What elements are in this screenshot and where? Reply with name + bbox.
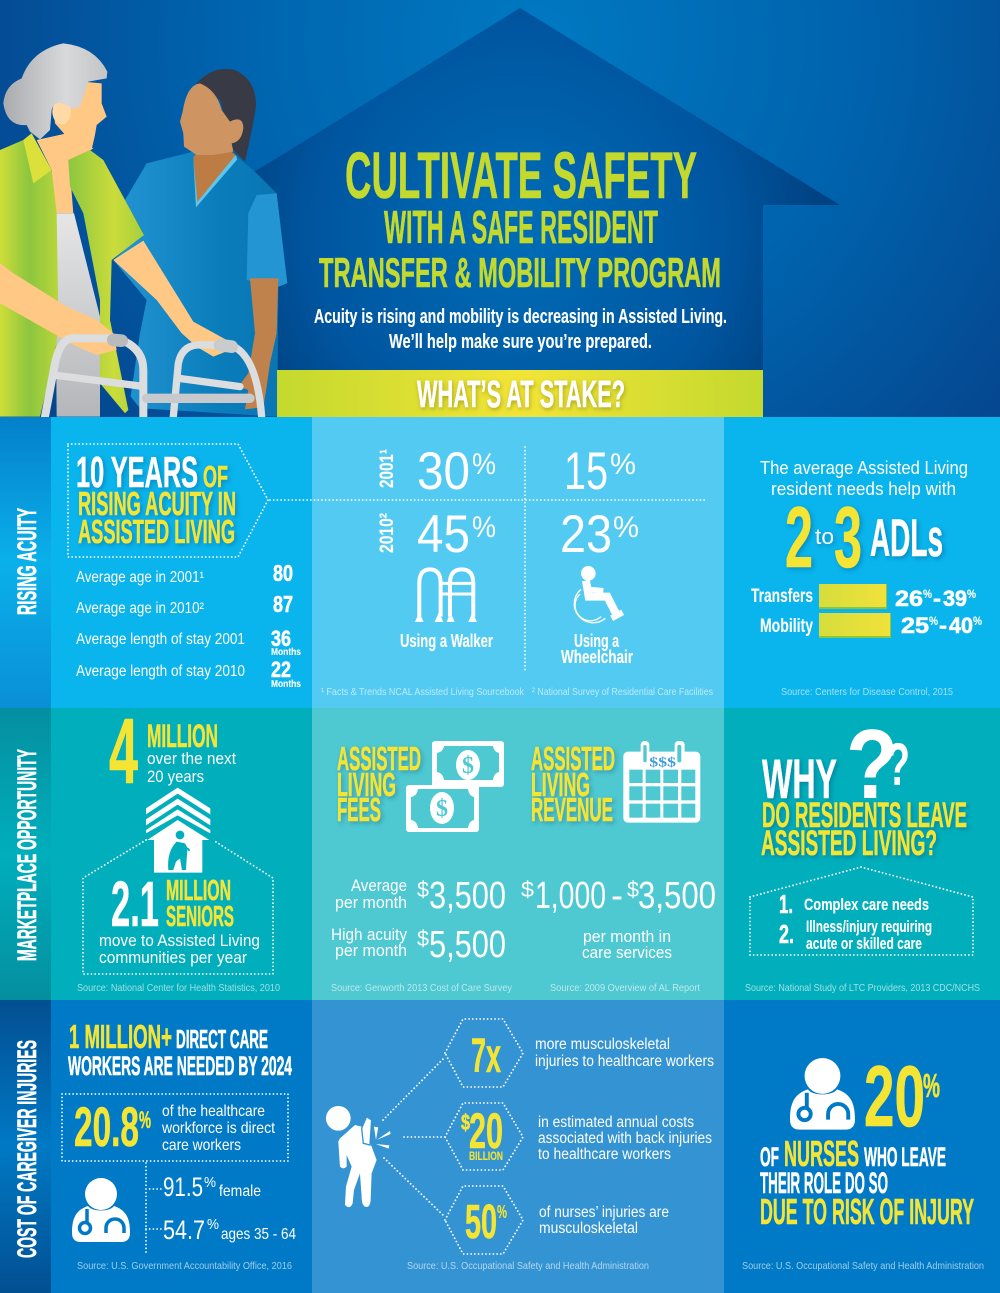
heading: assisted living revenue: ASSISTED bbox=[531, 740, 615, 777]
bar chart: transfers and mobility: 25 bbox=[901, 613, 929, 638]
heading: 1 million direct care workers: 1 MILLION+ bbox=[69, 1018, 172, 1055]
stat: 20.8 percent: care workers bbox=[162, 1137, 241, 1154]
heading: assisted living fees bbox=[337, 740, 421, 828]
stats: nurse demographics: female bbox=[219, 1183, 261, 1200]
house shape bbox=[240, 8, 840, 417]
stat list: age and length of stay: Months bbox=[271, 647, 301, 658]
stat hexagon: $20 billion: 20 bbox=[469, 1103, 503, 1159]
icon: money bills bbox=[406, 741, 504, 832]
bar chart: transfers and mobility: Mobility bbox=[760, 616, 813, 637]
title: CULTIVATE SAFETY bbox=[345, 138, 697, 212]
year labels: 2001¹ bbox=[377, 449, 398, 488]
title: WITH A SAFE RESIDENT bbox=[384, 201, 658, 253]
stat: 2.1 million seniors: communities per year bbox=[99, 948, 247, 967]
list: reasons for leaving: acute or skilled care bbox=[806, 934, 922, 953]
dotted box bbox=[62, 1094, 288, 1161]
bar chart: transfers and mobility: % bbox=[929, 614, 938, 628]
text: nurses leaving role: OF bbox=[760, 1142, 779, 1172]
band: what's at stake bbox=[277, 370, 763, 417]
dotted house frame bbox=[83, 840, 273, 974]
injury descriptions: in estimated annual costs bbox=[538, 1114, 694, 1131]
stat hexagon: $20 billion: $ bbox=[461, 1110, 470, 1135]
heading: why do residents leave bbox=[761, 747, 967, 863]
fee labels: per month bbox=[335, 942, 407, 960]
source: GAO: Source: U.S. Government Accountability Office, 2016 bbox=[77, 1260, 292, 1272]
injury descriptions: to healthcare workers bbox=[538, 1146, 671, 1163]
walker percentages: 45 bbox=[417, 505, 470, 564]
revenue amounts bbox=[521, 875, 716, 962]
label: using a wheelchair: Wheelchair bbox=[561, 647, 633, 667]
stat list: age and length of stay: Average length of stay 2001 bbox=[76, 631, 245, 648]
stat list: age and length of stay bbox=[76, 560, 301, 690]
text: average resident needs: The average Assisted Living bbox=[760, 458, 968, 478]
year labels bbox=[377, 449, 398, 553]
section label: rising acuity: RISING ACUITY bbox=[12, 508, 42, 615]
dotted house frame bbox=[750, 867, 973, 955]
stat list: age and length of stay: Average length of stay 2010 bbox=[76, 663, 245, 680]
icon: calendar: $$$ bbox=[649, 755, 676, 770]
revenue amounts: $ bbox=[521, 877, 534, 902]
bar chart: transfers and mobility: % bbox=[967, 587, 976, 601]
text: nurses leaving role: NURSES bbox=[784, 1133, 859, 1174]
heading: 1 million direct care workers bbox=[68, 1018, 292, 1081]
stat: 4 million: MILLION bbox=[147, 718, 218, 754]
wheelchair percentages: % bbox=[613, 511, 639, 544]
source: OSHA: Source: U.S. Occupational Safety and Health Administration bbox=[407, 1260, 649, 1272]
section label: marketplace opportunity: MARKETPLACE OPPORTUNITY bbox=[12, 749, 42, 961]
icon: question marks: ? bbox=[886, 731, 910, 798]
stats: nurse demographics: ages 35 - 64 bbox=[221, 1226, 296, 1243]
text: average resident needs bbox=[760, 458, 968, 499]
heading: assisted living revenue: LIVING bbox=[531, 766, 590, 803]
bar chart: transfers and mobility: Transfers bbox=[751, 586, 813, 607]
revenue amounts: $ bbox=[627, 877, 639, 902]
stat: 4 million bbox=[109, 699, 236, 803]
stat hexagon: 50 percent bbox=[445, 1186, 523, 1254]
walker percentages: 30 bbox=[417, 442, 470, 501]
stat: 20.8 percent: % bbox=[139, 1107, 151, 1134]
fee labels: Average bbox=[351, 877, 407, 895]
stat: 2 to 3 ADLs bbox=[785, 490, 943, 586]
walker percentages bbox=[417, 442, 496, 564]
source: NCHS: Source: National Center for Health Statistics, 2010 bbox=[77, 982, 280, 994]
dotted arrow frame bbox=[68, 444, 268, 557]
list: reasons for leaving: Complex care needs bbox=[804, 895, 929, 914]
injury descriptions: injuries to healthcare workers bbox=[535, 1053, 714, 1070]
subtitle bbox=[314, 305, 727, 353]
stat: 4 million: over the next bbox=[147, 749, 236, 768]
stat: 20 percent: % bbox=[923, 1067, 940, 1104]
stat: 2 to 3 ADLs: to bbox=[815, 524, 834, 549]
icon: money bills: $ bbox=[462, 753, 474, 779]
stat list: age and length of stay: Average age in 2001¹ bbox=[76, 569, 204, 586]
icon: question marks: ? bbox=[846, 709, 898, 819]
icon: worker with back pain bbox=[326, 1106, 391, 1207]
stat list: age and length of stay: Average age in 2010² bbox=[76, 600, 204, 617]
resident bbox=[0, 43, 230, 417]
heading: assisted living revenue bbox=[531, 740, 615, 828]
stat hexagon: 7x bbox=[445, 1019, 523, 1087]
stat list: age and length of stay: 80 bbox=[273, 560, 293, 586]
panel: caregiver injuries row background bbox=[0, 1000, 1000, 1293]
wheelchair percentages: % bbox=[610, 448, 636, 481]
stat: 20.8 percent bbox=[74, 1095, 275, 1158]
list: reasons for leaving: 2. bbox=[779, 919, 794, 949]
sources: fees and revenue: Source: Genworth 2013 Cost of Care Survey bbox=[331, 982, 513, 994]
bar chart: transfers and mobility: - bbox=[933, 586, 941, 611]
injury descriptions: more musculoskeletal bbox=[535, 1036, 670, 1053]
heading: assisted living fees: FEES bbox=[337, 791, 381, 828]
heading: assisted living revenue: REVENUE bbox=[531, 791, 613, 828]
bar chart: transfers and mobility: % bbox=[973, 614, 982, 628]
footnotes: ² National Survey of Residential Care Facilities bbox=[532, 686, 713, 698]
walker percentages: % bbox=[472, 448, 496, 481]
panel: marketplace row background bbox=[0, 708, 1000, 1000]
dotted divider lines bbox=[270, 447, 705, 672]
revenue amounts: - bbox=[611, 875, 623, 917]
dotted connectors bbox=[383, 1057, 445, 1217]
panel: rising acuity row background bbox=[0, 417, 1000, 708]
wheelchair percentages: 23 bbox=[560, 505, 612, 564]
heading: 10 years of rising acuity: RISING ACUITY IN bbox=[78, 485, 236, 522]
heading: 10 years of rising acuity bbox=[76, 448, 236, 550]
stat hexagon: 50 percent: % bbox=[497, 1202, 507, 1222]
wheelchair percentages: 15 bbox=[564, 442, 608, 501]
revenue amounts: per month in bbox=[583, 928, 671, 946]
heading: why do residents leave: WHY bbox=[762, 747, 837, 810]
text: nurses leaving role bbox=[760, 1133, 974, 1232]
bar chart: transfers and mobility: % bbox=[923, 587, 932, 601]
list: reasons for leaving: 1. bbox=[779, 889, 793, 919]
text: average resident needs: resident needs help with bbox=[771, 479, 956, 499]
stat hexagon: 7x: 7x bbox=[471, 1030, 501, 1083]
stat hexagon: $20 billion bbox=[445, 1103, 523, 1170]
illustration: resident and nurse with walkers bbox=[0, 43, 287, 417]
label: using a walker: Using a Walker bbox=[400, 631, 493, 651]
icon: nurse large bbox=[790, 1058, 855, 1130]
stat: 4 million: 20 years bbox=[147, 767, 204, 786]
revenue amounts: care services bbox=[582, 944, 672, 962]
icon: nurse bbox=[72, 1178, 130, 1242]
title bbox=[319, 138, 721, 296]
injury descriptions: of nurses’ injuries are bbox=[539, 1204, 669, 1221]
stat: 2 to 3 ADLs: 3 bbox=[834, 490, 862, 586]
bar chart: transfers and mobility: 26 bbox=[895, 586, 923, 611]
heading: assisted living fees: LIVING bbox=[337, 766, 396, 803]
icon: calendar bbox=[623, 741, 700, 823]
bar chart: transfers and mobility: 40 bbox=[949, 613, 973, 638]
stat list: age and length of stay: Months bbox=[271, 679, 301, 690]
stat hexagon: 50 percent: 50 bbox=[465, 1196, 497, 1249]
bar chart: transfers and mobility: 39 bbox=[943, 586, 967, 611]
stat list: age and length of stay: 22 bbox=[271, 657, 291, 682]
heading: 10 years of rising acuity: OF bbox=[203, 459, 228, 494]
fee amounts: 5,500 bbox=[429, 924, 506, 966]
sources: fees and revenue: Source: 2009 Overview of AL Report bbox=[550, 982, 700, 994]
revenue amounts: 1,000 bbox=[535, 875, 606, 917]
stats: nurse demographics bbox=[163, 1172, 296, 1245]
stats: nurse demographics: % bbox=[207, 1216, 219, 1233]
fee amounts: $ bbox=[417, 877, 429, 902]
revenue amounts: 3,500 bbox=[638, 875, 716, 917]
hero background bbox=[0, 0, 1000, 417]
subtitle: Acuity is rising and mobility is decreasing in Assisted Living. bbox=[314, 305, 727, 328]
label: using a wheelchair bbox=[561, 631, 633, 667]
bar chart: transfers and mobility bbox=[751, 584, 982, 638]
label: using a wheelchair: Using a bbox=[574, 631, 620, 651]
wheelchair percentages bbox=[560, 442, 639, 564]
sources: fees and revenue bbox=[331, 982, 700, 994]
fee labels bbox=[331, 877, 408, 960]
list: reasons for leaving bbox=[779, 889, 932, 953]
stat: 2.1 million seniors: SENIORS bbox=[166, 901, 234, 933]
stat: 4 million: 4 bbox=[109, 699, 138, 803]
stat: 20 percent: 20 bbox=[864, 1049, 925, 1145]
stat hexagon: $20 billion: BILLION bbox=[469, 1149, 503, 1163]
bar chart: transfers and mobility: - bbox=[939, 613, 947, 638]
icon: wheelchair bbox=[574, 566, 623, 623]
source: CDC: Source: Centers for Disease Control, 2015 bbox=[781, 686, 953, 698]
heading: 10 years of rising acuity: ASSISTED LIVING bbox=[78, 513, 235, 550]
icon: house with senior bbox=[146, 788, 210, 873]
icon: money bills: $ bbox=[436, 796, 448, 822]
fee labels: per month bbox=[335, 894, 407, 912]
stats: nurse demographics: 91.5 bbox=[163, 1172, 203, 1202]
stat: 20.8 percent: 20.8 bbox=[74, 1095, 139, 1158]
stat: 2 to 3 ADLs: 2 bbox=[785, 490, 813, 586]
stat: 20.8 percent: of the healthcare bbox=[162, 1103, 265, 1120]
section label: cost of caregiver injuries: COST OF CAREGIVER INJURIES bbox=[12, 1040, 42, 1258]
injury descriptions: associated with back injuries bbox=[538, 1130, 712, 1147]
stat: 2.1 million seniors: MILLION bbox=[166, 875, 231, 907]
stats: nurse demographics: 54.7 bbox=[163, 1215, 205, 1245]
stat: 20.8 percent: workforce is direct bbox=[161, 1120, 275, 1137]
heading: 10 years of rising acuity: 10 YEARS bbox=[76, 448, 198, 497]
stat list: age and length of stay: 87 bbox=[273, 591, 293, 617]
year labels: 2010² bbox=[377, 513, 398, 553]
walker percentages: % bbox=[472, 511, 496, 544]
footnotes bbox=[321, 686, 713, 698]
fee labels: High acuity bbox=[331, 926, 408, 944]
heading: assisted living fees: ASSISTED bbox=[337, 740, 421, 777]
icon: walker bbox=[415, 569, 477, 622]
walker frames bbox=[45, 338, 262, 417]
injury descriptions: musculoskeletal bbox=[539, 1220, 638, 1237]
heading: 1 million direct care workers: WORKERS ARE NEEDED BY 2024 bbox=[68, 1051, 292, 1081]
band: what's at stake: WHAT’S AT STAKE? bbox=[417, 374, 625, 416]
injury descriptions bbox=[535, 1036, 714, 1237]
subtitle: We’ll help make sure you’re prepared. bbox=[389, 330, 652, 353]
stat: 2.1 million seniors: 2.1 bbox=[111, 868, 159, 940]
list: reasons for leaving: Illness/injury requiring bbox=[806, 917, 932, 936]
stat: 2.1 million seniors: move to Assisted Living bbox=[99, 931, 260, 950]
stat list: age and length of stay: 36 bbox=[271, 626, 291, 651]
stats: nurse demographics: % bbox=[204, 1174, 216, 1191]
footnotes: ¹ Facts & Trends NCAL Assisted Living Sourcebook bbox=[321, 686, 525, 698]
fee amounts: $ bbox=[417, 926, 429, 951]
stat: 2.1 million seniors bbox=[99, 868, 260, 967]
nurse bbox=[113, 69, 287, 417]
fee amounts bbox=[417, 875, 506, 966]
heading: 1 million direct care workers: DIRECT CARE bbox=[176, 1024, 268, 1054]
fee amounts: 3,500 bbox=[429, 875, 506, 917]
dotted connector bbox=[146, 1163, 161, 1254]
